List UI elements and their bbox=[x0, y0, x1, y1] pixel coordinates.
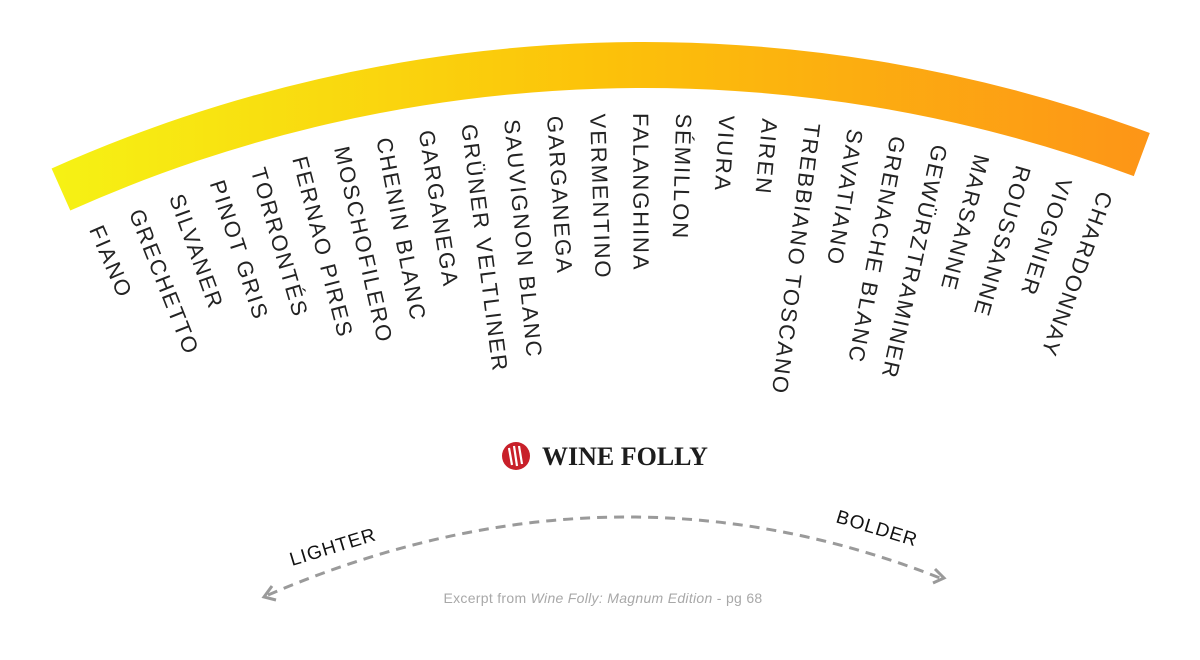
grape labels: SÉMILLON bbox=[668, 113, 696, 240]
grape labels: SAVATIANO bbox=[822, 127, 868, 268]
grape labels: GRÜNER VELTLINER bbox=[456, 123, 513, 374]
grape labels: VIURA bbox=[710, 115, 739, 193]
label: lighter: LIGHTER bbox=[287, 525, 379, 571]
grape labels: TORRONTÉS bbox=[246, 165, 313, 320]
grape labels: GARGANEGA bbox=[542, 115, 577, 275]
grape labels: GARGANEGA bbox=[414, 128, 463, 289]
grape labels: VIOGNIER bbox=[1016, 175, 1077, 300]
grape labels: SAUVIGNON BLANC bbox=[499, 118, 547, 359]
label: bolder: BOLDER bbox=[834, 507, 920, 551]
grape labels: AIREN bbox=[750, 118, 782, 196]
grape labels: TREBBIANO TOSCANO bbox=[767, 122, 825, 396]
grape labels: GEWÜRZTRAMINER bbox=[877, 142, 952, 382]
grape labels: FIANO bbox=[84, 222, 138, 302]
grape labels: MOSCHOFILERO bbox=[329, 144, 398, 346]
grape labels: GRENACHE BLANC bbox=[843, 134, 910, 366]
grape labels: MARSANNE bbox=[936, 152, 994, 294]
gradient arc band bbox=[52, 42, 1150, 210]
grape labels: SILVANER bbox=[164, 191, 229, 313]
grape labels: ROUSSANNE bbox=[969, 163, 1036, 320]
caption: Excerpt from Wine Folly: Magnum Edition - pg 68 bbox=[443, 590, 763, 606]
grape labels: GRECHETTO bbox=[124, 205, 204, 359]
icon: red logo circle bbox=[502, 442, 530, 470]
arrow: dashed lighter-bolder arc bbox=[264, 517, 944, 600]
grape labels: CHENIN BLANC bbox=[371, 135, 431, 323]
grape labels bbox=[84, 113, 1118, 396]
logo text: WINE FOLLY bbox=[542, 442, 708, 471]
grape labels: FALANGHINA bbox=[628, 113, 654, 271]
grape labels: PINOT GRIS bbox=[205, 177, 274, 323]
grape labels: CHARDONNAY bbox=[1036, 188, 1118, 361]
logo: Wine Folly bbox=[502, 442, 708, 471]
grape labels: VERMENTINO bbox=[585, 113, 616, 280]
grape labels: FERNAO PIRES bbox=[287, 154, 358, 341]
